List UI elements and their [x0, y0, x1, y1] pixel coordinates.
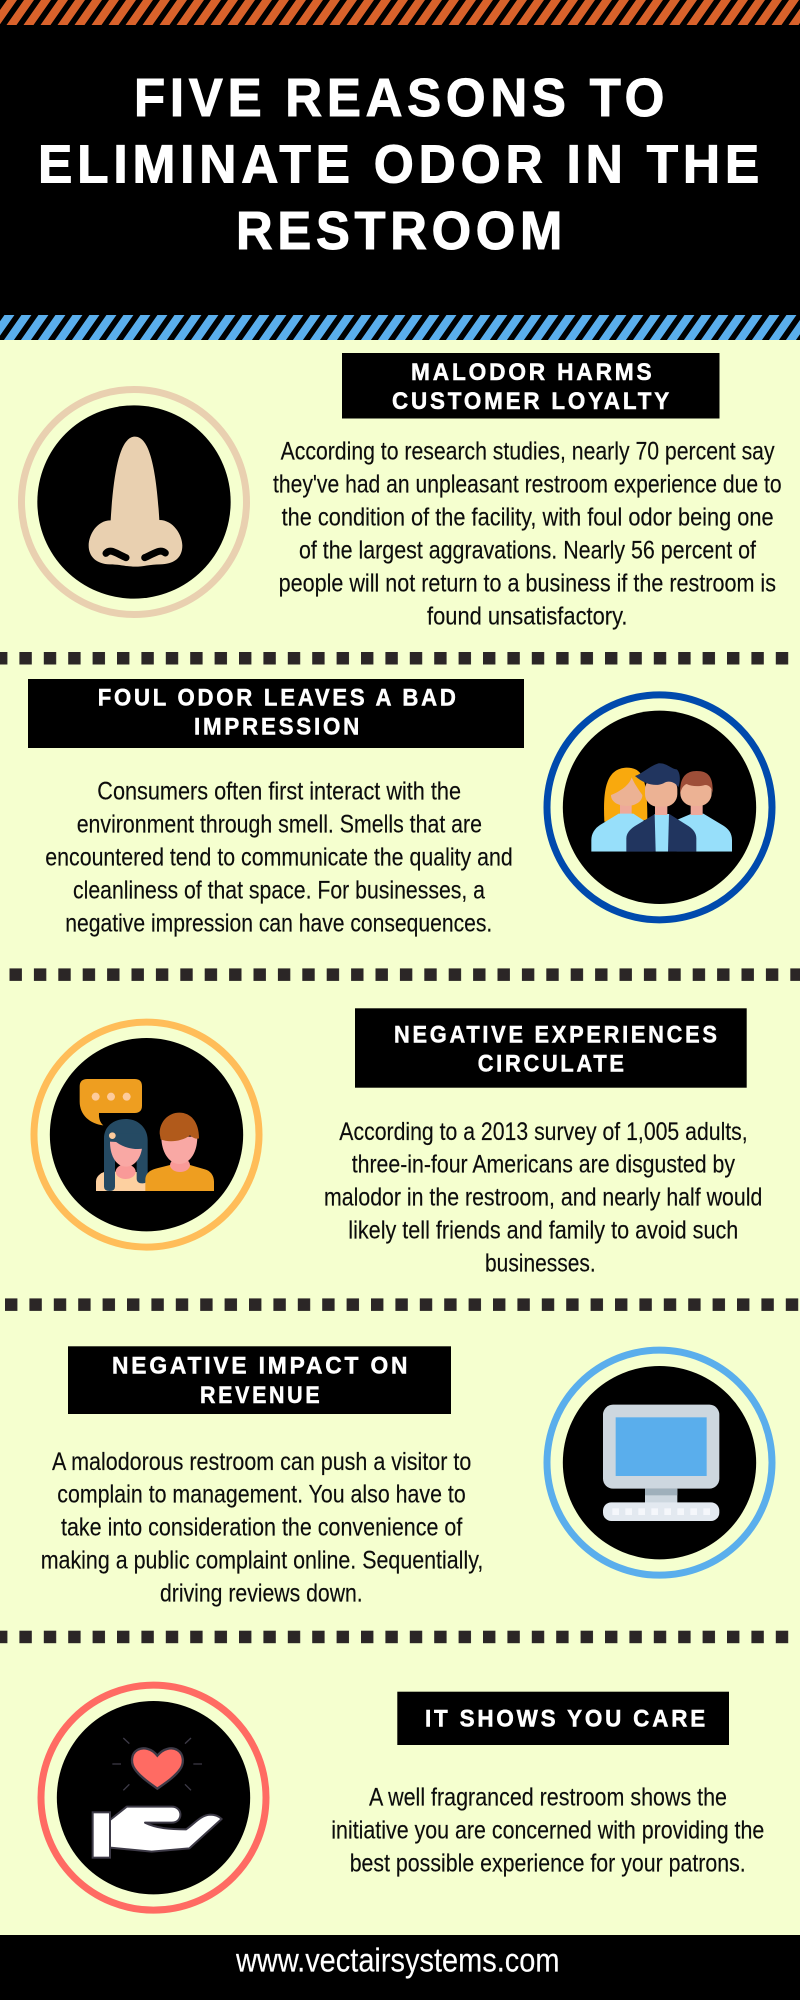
blue hazard stripe	[0, 315, 800, 340]
body text: found unsatisfactory.	[427, 603, 628, 631]
panel: it shows you care	[41, 1685, 764, 1910]
divider	[0, 1298, 800, 1311]
body text	[45, 777, 513, 937]
body text: negative impression can have consequences.	[65, 909, 492, 937]
icon: two people talking	[34, 1022, 259, 1247]
body text: likely tell friends and family to avoid such	[348, 1217, 738, 1245]
body text: A malodorous restroom can push a visitor to	[52, 1448, 471, 1476]
body text: businesses.	[485, 1250, 596, 1278]
heading box: FOUL ODOR LEAVES A BAD	[98, 685, 459, 712]
panel: malodor harms customer loyalty	[21, 353, 782, 631]
title: FIVE REASONS TO	[134, 68, 669, 128]
body text: cleanliness of that space. For businesses, a	[73, 876, 485, 904]
heading box: MALODOR HARMS	[411, 359, 654, 386]
body text	[324, 1118, 762, 1278]
body text: A well fragranced restroom shows the	[369, 1784, 727, 1812]
body text	[273, 438, 782, 631]
body text: take into consideration the convenience of	[61, 1514, 462, 1542]
heading box	[397, 1692, 729, 1745]
icon: group of people	[547, 695, 772, 920]
heading box: CUSTOMER LOYALTY	[392, 388, 672, 415]
heading box: IMPRESSION	[194, 714, 362, 741]
heading box	[28, 679, 524, 748]
title: ELIMINATE ODOR IN THE	[38, 134, 764, 194]
heading box	[68, 1346, 451, 1414]
heading box: NEGATIVE EXPERIENCES	[394, 1022, 720, 1049]
body text: complain to management. You also have to	[57, 1481, 466, 1509]
body text: environment through smell. Smells that are	[77, 810, 482, 838]
heading box	[342, 353, 720, 418]
heading box: IT SHOWS YOU CARE	[425, 1706, 708, 1733]
icon: hand holding heart	[41, 1685, 266, 1910]
body text	[331, 1784, 764, 1878]
body text: best possible experience for your patrons.	[350, 1850, 746, 1878]
body text: Consumers often first interact with the	[97, 777, 461, 805]
panel: foul odor leaves a bad impression	[28, 679, 772, 937]
body text: driving reviews down.	[160, 1580, 363, 1608]
heading box: CIRCULATE	[478, 1051, 627, 1078]
body text: encountered tend to communicate the quality and	[45, 843, 513, 871]
heading box	[355, 1008, 747, 1088]
orange hazard stripe	[0, 0, 800, 25]
divider	[0, 968, 800, 981]
panel: negative impact on revenue	[41, 1346, 772, 1608]
footer band	[0, 1935, 800, 2000]
title	[38, 68, 764, 261]
divider	[0, 1631, 800, 1643]
heading box: NEGATIVE IMPACT ON	[112, 1353, 410, 1380]
website url: www.vectairsystems.com	[235, 1942, 560, 1979]
divider	[0, 652, 800, 664]
body text: three-in-four Americans are disgusted by	[352, 1151, 735, 1179]
icon: desktop computer	[547, 1350, 772, 1575]
panel: negative experiences circulate	[34, 1008, 762, 1278]
title: RESTROOM	[236, 201, 567, 261]
header band	[0, 0, 800, 340]
heading box: REVENUE	[200, 1382, 322, 1409]
icon: nose	[21, 389, 246, 614]
body text: making a public complaint online. Sequentially,	[41, 1547, 483, 1575]
body text	[41, 1448, 483, 1608]
